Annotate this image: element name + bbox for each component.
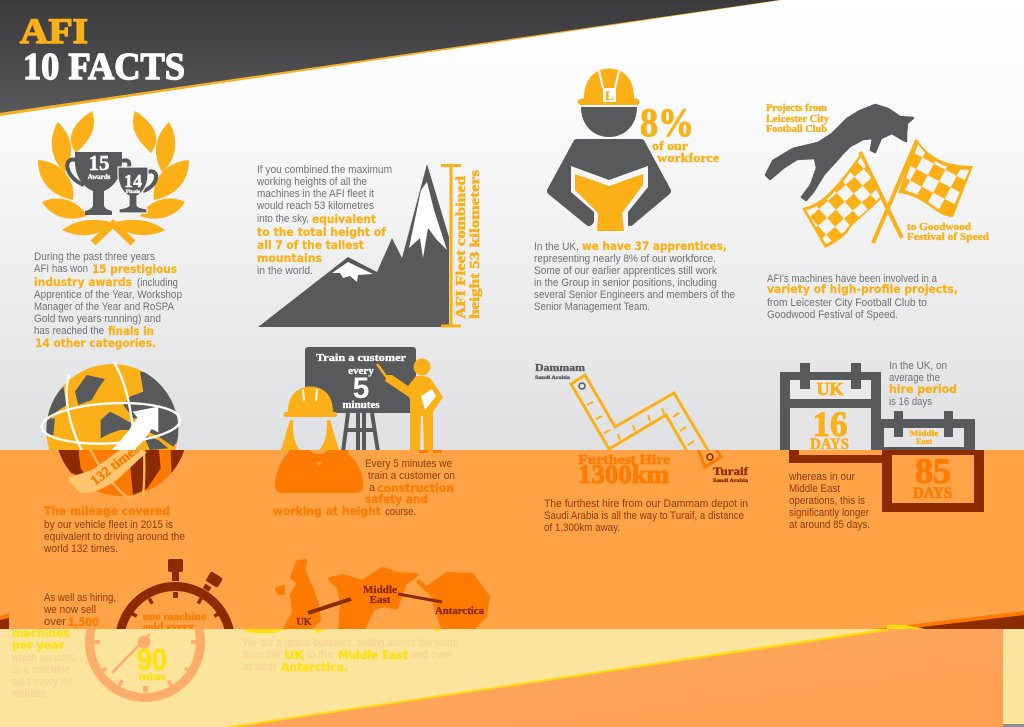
text: mountains paragraph: If you combined the maximum bbox=[257, 164, 392, 176]
label: Leicester City: Football Club bbox=[766, 124, 827, 135]
panel: mountains bbox=[256, 164, 483, 327]
text: apprentices paragraph bbox=[534, 239, 735, 313]
icon: ruler route bbox=[571, 375, 712, 467]
ruler route, lower part bbox=[698, 449, 721, 467]
text: hire period paragraph: at around 85 days. bbox=[789, 519, 870, 531]
text: projects paragraph: from Leicester City Football Club to bbox=[767, 297, 927, 309]
map remnants bbox=[243, 629, 441, 633]
text: mileage paragraph: The mileage covered bbox=[44, 504, 170, 518]
text: hire period intro: is 16 days bbox=[889, 396, 932, 408]
panel: projects bbox=[766, 103, 989, 321]
text: apprentices paragraph: In the UK, bbox=[534, 241, 579, 253]
label: combined height bbox=[454, 169, 483, 319]
text: mountains paragraph: working heights of all the bbox=[256, 176, 367, 188]
text: sales paragraph, lower part: which equates bbox=[11, 652, 75, 664]
text: apprentices paragraph: in the Group in senior positions, including bbox=[534, 277, 717, 289]
text: projects paragraph: Goodwood Festival of Speed. bbox=[767, 309, 898, 321]
label: combined height: height 53 kilometers bbox=[468, 169, 483, 319]
text: mountains paragraph: mountains bbox=[257, 251, 322, 265]
text: mountains paragraph: to the total height of bbox=[257, 225, 387, 239]
text: global paragraph: from the bbox=[243, 649, 280, 661]
text: projects paragraph: variety of high-profile projects, bbox=[767, 282, 958, 296]
icon: easel board: minutes bbox=[342, 399, 380, 411]
icon: trophies: Finals bbox=[126, 189, 140, 195]
label: Turaif: Saudi Arabia bbox=[713, 478, 748, 484]
map: UK, Middle East, Antarctica: Middle bbox=[363, 584, 397, 596]
text: mountains paragraph: equivalent bbox=[312, 212, 376, 226]
text: sales paragraph, upper part bbox=[43, 592, 116, 629]
ribbon: 132 times: 132 times bbox=[88, 442, 143, 489]
label: Leicester City: Leicester City bbox=[766, 114, 829, 125]
label: Dammam bbox=[535, 363, 585, 381]
label: 90 mins bbox=[138, 648, 166, 680]
icon: easel board: every bbox=[348, 365, 374, 377]
text: global paragraph: We are a global business, selling across the world bbox=[243, 637, 458, 649]
label: 8% of our workforce: of our bbox=[652, 138, 688, 153]
text: training paragraph: safety and bbox=[365, 492, 428, 506]
icon: easel board bbox=[305, 347, 416, 452]
label: one machine sold every: one machine bbox=[143, 611, 206, 623]
text: mileage paragraph: by our vehicle fleet in 2015 is bbox=[44, 519, 173, 531]
text: mountains paragraph: all 7 of the tallest bbox=[257, 238, 364, 252]
text: awards paragraph: (including bbox=[137, 277, 178, 289]
label: Dammam: Saudi Arabia bbox=[535, 375, 570, 381]
text: global paragraph: Antarctica. bbox=[281, 660, 348, 674]
text: mileage paragraph: equivalent to driving around the bbox=[44, 531, 185, 543]
text: global paragraph: UK bbox=[284, 648, 305, 662]
icon: trophies: 15 bbox=[88, 151, 110, 175]
text: awards paragraph: 14 other categories. bbox=[35, 336, 156, 350]
title: 10 FACTS: 10 FACTS bbox=[23, 46, 185, 88]
text: training paragraph: course. bbox=[385, 506, 416, 518]
label: combined height: AFI Fleet combined bbox=[454, 176, 469, 319]
text: sales paragraph, upper part: we now sell bbox=[43, 604, 96, 616]
text: hire period paragraph: Middle East bbox=[789, 483, 840, 495]
label: Turaif: Turaif bbox=[713, 464, 749, 478]
calendars, lower part bbox=[789, 450, 984, 512]
label: 8% of our workforce bbox=[640, 100, 719, 165]
label: Dammam: Dammam bbox=[535, 363, 585, 374]
text: mountains paragraph: machines in the AFI fleet it bbox=[257, 188, 374, 200]
icon: trophies: Awards bbox=[88, 173, 111, 181]
text: awards paragraph: finals in bbox=[108, 324, 154, 338]
text: hire period paragraph: significantly longer bbox=[789, 507, 869, 519]
icon: chequered flags bbox=[802, 140, 973, 248]
band: orange middle layer bbox=[0, 450, 1024, 629]
text: awards paragraph: has reached the bbox=[34, 325, 104, 337]
map: UK, Middle East, Antarctica: Antarctica bbox=[435, 605, 484, 617]
icon: fox bbox=[766, 105, 913, 200]
text: projects paragraph: AFI's machines have been involved in a bbox=[767, 273, 938, 285]
text: mountains paragraph bbox=[256, 164, 392, 277]
map: UK, Middle East, Antarctica: UK bbox=[296, 617, 312, 628]
text: hire period intro: average the bbox=[889, 372, 940, 384]
icon: worker with book: L bbox=[605, 88, 614, 103]
text: training paragraph bbox=[273, 458, 455, 518]
text: apprentices paragraph: we have 37 apprentices, bbox=[582, 239, 727, 253]
text: sales paragraph, lower part: per year bbox=[12, 638, 64, 652]
panel: awards bbox=[34, 111, 189, 350]
text: training paragraph: train a customer on bbox=[368, 470, 455, 482]
stopwatch, lower part bbox=[85, 629, 205, 702]
header banner bbox=[0, 0, 782, 116]
icon: calendar UK: UK bbox=[816, 379, 844, 399]
label: furthest hire bbox=[578, 454, 670, 484]
text: mileage paragraph bbox=[43, 504, 185, 555]
text: mountains paragraph: into the sky, bbox=[257, 213, 309, 225]
text: training paragraph: Every 5 minutes we bbox=[365, 458, 452, 470]
label: Turaif bbox=[713, 466, 748, 482]
label: 8% of our workforce: 8% bbox=[640, 100, 694, 145]
band: yellow lower layer bbox=[0, 629, 1024, 727]
calendars, lower part: DAYS bbox=[913, 485, 952, 502]
text: awards paragraph: AFI has won bbox=[34, 263, 88, 275]
title: AFI: AFI bbox=[20, 11, 88, 51]
trainer feet bbox=[419, 450, 442, 453]
icon: calendar UK bbox=[780, 363, 881, 453]
icon: trophies: 14 bbox=[124, 171, 142, 191]
ribbon: 132 times bbox=[67, 450, 147, 494]
text: furthest hire paragraph bbox=[544, 498, 748, 534]
text: apprentices paragraph: several Senior Engineers and members of the bbox=[534, 289, 735, 301]
icon: trophies bbox=[67, 151, 156, 215]
panel: globe, upper part bbox=[41, 362, 181, 500]
text: furthest hire paragraph: The furthest hire from our Dammam depot in bbox=[544, 498, 748, 510]
text: sales paragraph, lower part: machines bbox=[12, 626, 70, 640]
panel: hire period, upper part bbox=[780, 360, 975, 453]
stopwatch, upper part bbox=[116, 559, 234, 629]
text: awards paragraph: 15 prestigious bbox=[92, 262, 177, 276]
text: hire period paragraph: operations, this is bbox=[789, 495, 865, 507]
text: hire period intro: hire period bbox=[889, 382, 957, 396]
icon: calendar UK: 16 bbox=[812, 404, 848, 444]
text: furthest hire paragraph: of 1,300km away. bbox=[544, 522, 620, 534]
footer stripe bbox=[225, 628, 888, 727]
label: Goodwood: Festival of Speed bbox=[907, 232, 989, 243]
calendars, lower part: 85 bbox=[915, 451, 951, 491]
icon: calendar Middle East: Middle bbox=[910, 428, 939, 438]
icon: easel board: 5 bbox=[353, 372, 369, 405]
text: projects paragraph bbox=[767, 273, 958, 321]
icon: laurel wreath bbox=[38, 111, 189, 243]
text: apprentices paragraph: Some of our earlier apprentices still work bbox=[534, 265, 717, 277]
map: UK, Middle East, Antarctica: East bbox=[370, 594, 391, 606]
text: awards paragraph: industry awards bbox=[34, 275, 132, 289]
icon: calendar Middle East bbox=[881, 411, 975, 452]
label: 8% of our workforce: workforce bbox=[657, 150, 719, 165]
label: one machine sold every: sold every bbox=[143, 621, 195, 633]
icon: worker with book bbox=[551, 68, 667, 233]
label: Goodwood: to Goodwood bbox=[907, 222, 971, 233]
text: global paragraph bbox=[243, 637, 458, 674]
text: awards paragraph: Manager of the Year and RoSPA bbox=[34, 301, 175, 313]
icon: calendar UK: DAYS bbox=[810, 436, 849, 453]
text: hire period intro bbox=[889, 360, 957, 408]
woman, lower part bbox=[275, 450, 363, 493]
text: training paragraph: working at height bbox=[273, 504, 381, 518]
text: sales paragraph, lower part: sold every 90 bbox=[12, 676, 72, 688]
footer triangle bbox=[225, 626, 1003, 727]
text: hire period intro: In the UK, on bbox=[889, 360, 947, 372]
text: hire period paragraph: whereas in our bbox=[788, 471, 855, 483]
label: one machine sold every bbox=[143, 612, 206, 629]
text: awards paragraph: During the past three years bbox=[34, 251, 155, 263]
icon: easel board: Train a customer bbox=[316, 352, 406, 364]
label: 90 mins: 90 bbox=[137, 642, 167, 677]
corner sliver bbox=[1003, 724, 1024, 727]
label: Goodwood bbox=[907, 222, 989, 243]
icon: height bracket bbox=[441, 166, 461, 326]
text: mountains paragraph: in the world. bbox=[257, 265, 313, 277]
text: global paragraph: Middle East bbox=[338, 648, 408, 662]
panel: furthest hire, upper part bbox=[535, 363, 712, 467]
text: mountains paragraph: would reach 53 kilometres bbox=[256, 200, 374, 212]
label: furthest hire: Furthest Hire bbox=[578, 453, 670, 468]
text: sales paragraph, upper part: 1,500 bbox=[68, 615, 99, 629]
panel: apprentices bbox=[534, 68, 735, 313]
footer wrap sliver bbox=[0, 613, 9, 629]
text: sales paragraph, lower part: to a machine bbox=[12, 664, 70, 676]
footer corner bbox=[875, 611, 1024, 630]
icon: mountain bbox=[258, 164, 449, 327]
text: sales paragraph, lower part bbox=[12, 629, 75, 697]
text: furthest hire paragraph: Saudi Arabia is all the way to Turaif, a distance bbox=[544, 510, 744, 522]
label: Leicester City bbox=[766, 103, 829, 135]
text: hire period paragraph bbox=[788, 471, 870, 531]
text: apprentices paragraph: Senior Management Team. bbox=[534, 301, 650, 313]
icon: trainer bbox=[377, 358, 443, 452]
map: UK, Middle East, Antarctica bbox=[277, 561, 488, 631]
text: sales paragraph, upper part: over bbox=[44, 616, 66, 628]
text: global paragraph: to the bbox=[307, 649, 333, 661]
label: Leicester City: Projects from bbox=[766, 103, 828, 114]
text: sales paragraph, lower part: minutes. bbox=[12, 688, 48, 700]
text: global paragraph: and even bbox=[412, 649, 452, 661]
text: awards paragraph: Gold two years running) and bbox=[34, 313, 161, 325]
text: mileage paragraph: world 132 times. bbox=[43, 543, 118, 555]
text: awards paragraph bbox=[34, 251, 182, 350]
label: 90 mins: mins bbox=[138, 669, 166, 683]
text: training paragraph: a bbox=[369, 482, 376, 494]
text: apprentices paragraph: representing nearly 8% of our workforce. bbox=[534, 253, 716, 265]
icon: woman in helmet bbox=[266, 386, 354, 493]
text: global paragraph: as far as bbox=[243, 661, 277, 673]
panel: training, upper part bbox=[266, 347, 443, 493]
text: sales paragraph, upper part: As well as hiring, bbox=[44, 592, 116, 604]
globe, lower part bbox=[58, 450, 184, 501]
icon: calendar Middle East: East bbox=[916, 436, 932, 446]
text: training paragraph: construction bbox=[377, 481, 454, 495]
label: furthest hire: 1300km bbox=[578, 460, 669, 489]
text: awards paragraph: Apprentice of the Year, Workshop bbox=[34, 289, 182, 301]
